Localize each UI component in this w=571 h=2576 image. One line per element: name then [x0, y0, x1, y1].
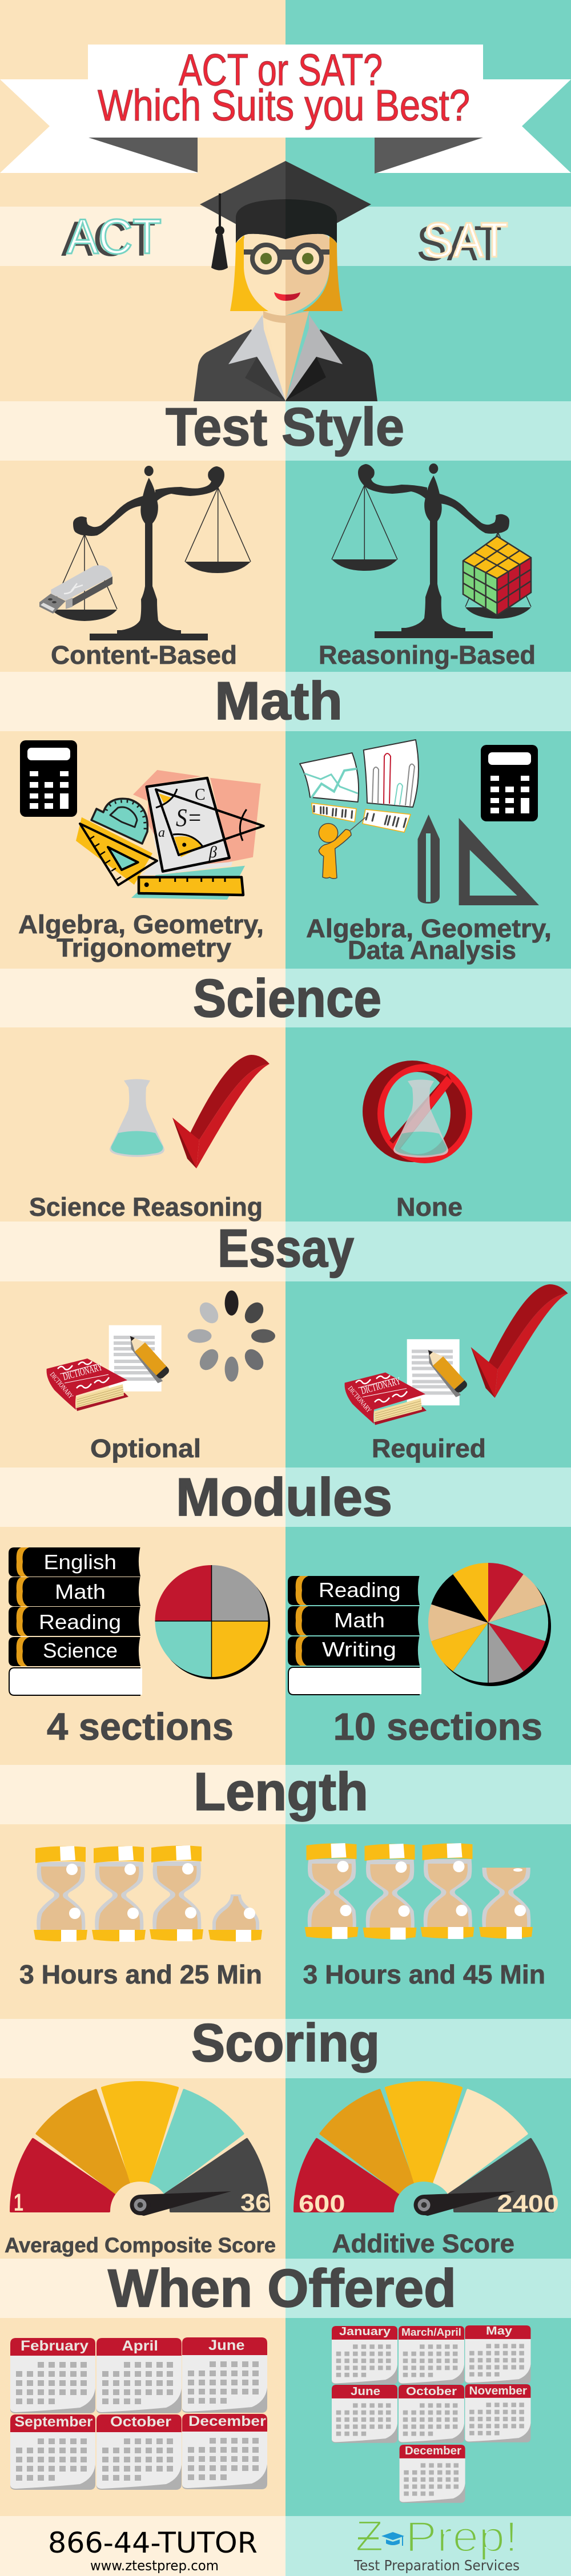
label: ACT length: 3 Hours and 25 Min — [19, 1960, 262, 1989]
illustration: geometry tools: S= — [176, 804, 202, 832]
heading: Science: Science — [193, 968, 381, 1028]
pie chart ACT: 4 sections — [155, 1565, 270, 1679]
book stack ACT: Science — [43, 1639, 118, 1662]
book stack ACT: English — [43, 1550, 116, 1574]
icon: dictionary and paper ACT: DICTIONARY — [62, 1361, 104, 1382]
title: ACT or SAT? — [179, 45, 383, 95]
calendars ACT: December — [188, 2413, 266, 2429]
heading: Modules: Modules — [176, 1467, 392, 1527]
label: SAT length: 3 Hours and 45 Min — [303, 1960, 545, 1989]
heading: Length: Length — [194, 1761, 368, 1821]
illustration: data analysis charts — [300, 740, 419, 878]
icon: USB drive — [39, 565, 112, 614]
icon: loading spinner — [187, 1291, 275, 1382]
icon: check mark ACT — [172, 1055, 270, 1168]
calendars ACT: February — [21, 2338, 89, 2354]
illustration: geometry tools: C — [195, 786, 206, 804]
calendars ACT — [10, 2337, 267, 2490]
label: SAT: SAT — [423, 213, 508, 268]
label: Content-Based: Content-Based — [51, 640, 237, 670]
title: Which Suits you Best? — [98, 81, 470, 130]
label: SAT: SAT — [416, 216, 502, 271]
icon: ACT balance scale — [51, 466, 251, 640]
calendars SAT: November — [469, 2385, 527, 2397]
calendars SAT: May — [486, 2325, 513, 2337]
label: ACT: ACT — [61, 212, 156, 267]
band: When Offered — [0, 2259, 571, 2318]
logo: Z-Prep — [355, 2512, 518, 2561]
calendars SAT: March/April — [401, 2327, 461, 2338]
title ribbon — [0, 45, 571, 174]
illustration: graduate woman — [194, 161, 377, 401]
heading: Scoring: Scoring — [191, 2013, 380, 2073]
icon: pencil outline — [418, 815, 440, 904]
icon: calculator ACT — [20, 740, 77, 817]
footer: website: www.ztestprep.com — [90, 2558, 219, 2574]
icon: dictionary and paper ACT — [47, 1325, 172, 1411]
page background: SAT column — [286, 0, 571, 2576]
heading: When Offered: When Offered — [108, 2258, 456, 2318]
icon: SAT balance scale — [332, 463, 531, 638]
icon: set square — [459, 818, 539, 905]
book stack SAT — [288, 1576, 421, 1695]
icon: Rubik's cube — [463, 537, 531, 615]
heading: Math: Math — [215, 671, 343, 731]
band: Modules — [0, 1468, 571, 1527]
label: Reasoning-Based: Reasoning-Based — [319, 640, 536, 670]
label: ACT: ACT — [67, 209, 162, 264]
label: Optional: Optional — [90, 1434, 201, 1463]
logo: Z-Prep: Prep! — [405, 2513, 518, 2561]
hourglasses ACT — [34, 1845, 262, 1942]
label: ACT math topics: Algebra, Geometry, — [18, 910, 264, 939]
gauge SAT: 600 to 2400: 2400 — [497, 2190, 559, 2218]
calendars SAT — [332, 2325, 530, 2503]
icon: dictionary and paper ACT: DICTIONARY — [49, 1370, 75, 1400]
label: SAT math topics — [306, 914, 552, 965]
icon: prohibited flask — [363, 1061, 472, 1163]
illustration: geometry tools: β — [208, 844, 217, 861]
label: SAT math topics: Algebra, Geometry, — [306, 914, 552, 943]
gauge SAT: 600 to 2400 — [295, 2082, 559, 2218]
label: ACT math topics — [18, 910, 264, 962]
logo tagline: Test Preparation Services — [353, 2557, 520, 2574]
illustration: geometry tools: a — [158, 825, 165, 840]
label: Required: Required — [372, 1434, 486, 1463]
book stack ACT — [9, 1547, 142, 1695]
label: ACT math topics: Trigonometry — [57, 933, 231, 962]
heading: Essay: Essay — [218, 1218, 354, 1278]
icon: dictionary and paper SAT: DICTIONARY — [360, 1375, 402, 1396]
icon: dictionary and paper SAT — [345, 1339, 471, 1425]
page background: ACT column — [0, 0, 286, 2576]
book stack SAT: Math — [334, 1609, 385, 1632]
band: Test Style — [0, 401, 571, 461]
calendars ACT: October — [110, 2414, 171, 2430]
band: Math — [0, 672, 571, 731]
gauge ACT: 1 to 36: 36 — [240, 2189, 270, 2216]
gauge ACT: 1 to 36 — [11, 2082, 270, 2216]
calendars SAT: June — [351, 2385, 380, 2398]
calendars SAT: December — [405, 2445, 461, 2457]
pie chart SAT: 10 sections — [428, 1563, 551, 1686]
label: 4 sections: 4 sections — [47, 1706, 234, 1748]
label: Science Reasoning: Science Reasoning — [29, 1192, 263, 1222]
book stack SAT: Reading — [319, 1578, 401, 1602]
band: Science — [0, 969, 571, 1027]
calendars SAT: October — [406, 2385, 457, 2398]
icon: calculator SAT — [481, 745, 538, 821]
title — [98, 45, 470, 130]
calendars ACT: September — [15, 2414, 93, 2430]
book stack ACT: Reading — [39, 1610, 121, 1634]
footer: phone number: 866-44-TUTOR — [48, 2526, 258, 2559]
illustration: geometry tools — [76, 770, 264, 900]
book stack SAT: Writing — [322, 1638, 396, 1661]
icon: flask ACT — [110, 1079, 164, 1157]
label: Averaged Composite Score: Averaged Composite Score — [5, 2234, 276, 2257]
icon: check mark SAT — [471, 1284, 568, 1398]
logo: Z-Prep: Z — [355, 2512, 384, 2561]
band: ACT SAT labels — [0, 207, 571, 266]
hourglasses SAT — [305, 1843, 536, 1940]
calendars SAT: January — [339, 2325, 391, 2338]
label: None: None — [396, 1192, 463, 1222]
band: Essay — [0, 1222, 571, 1281]
label: Additive Score: Additive Score — [332, 2229, 514, 2258]
label: 10 sections: 10 sections — [333, 1706, 542, 1748]
label: SAT math topics: Data Analysis — [348, 936, 516, 965]
calendars ACT: June — [208, 2337, 245, 2353]
gauge ACT: 1 to 36: 1 — [14, 2189, 23, 2216]
gauge SAT: 600 to 2400: 600 — [299, 2190, 345, 2218]
book stack ACT: Math — [55, 1580, 106, 1603]
band: Length — [0, 1765, 571, 1824]
band: Scoring — [0, 2019, 571, 2078]
band: footer — [0, 2516, 571, 2576]
heading: Test Style: Test Style — [166, 397, 404, 457]
icon: dictionary and paper SAT: DICTIONARY — [347, 1384, 373, 1414]
calendars ACT: April — [122, 2338, 158, 2354]
